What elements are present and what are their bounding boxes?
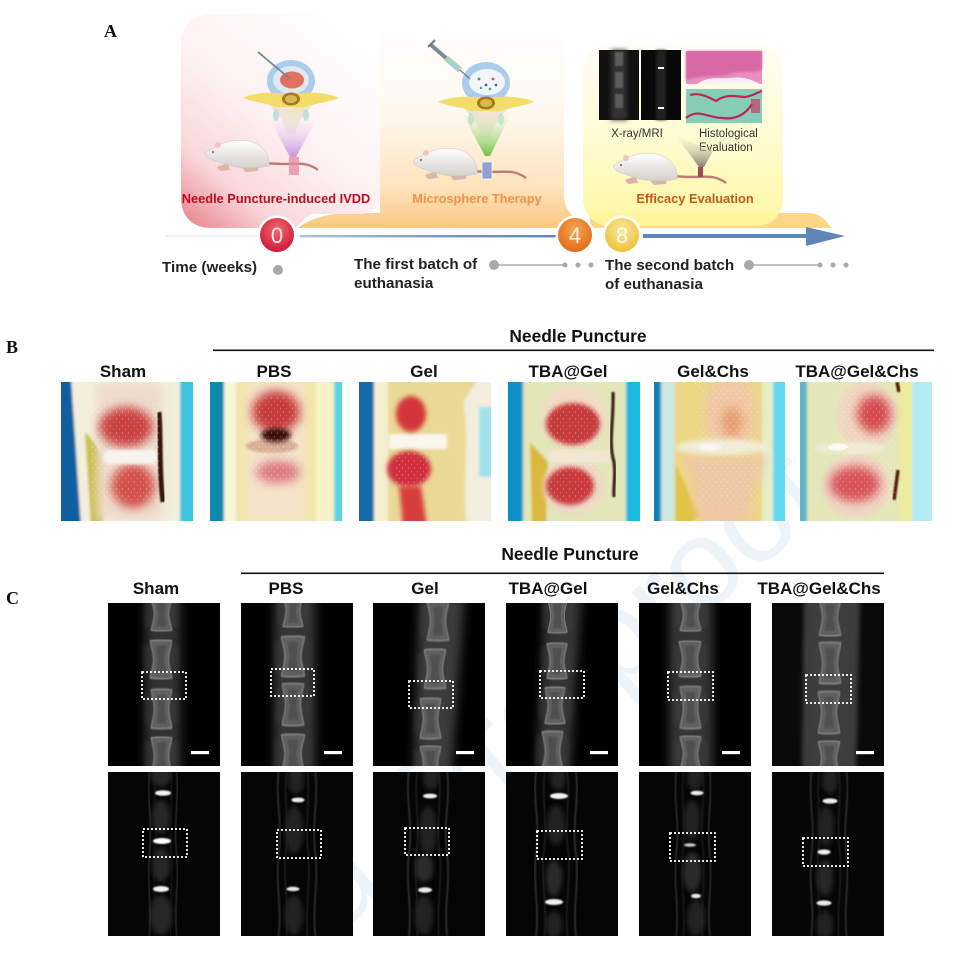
MRI: TBA@Gel — [506, 772, 618, 936]
label: X-ray/MRI: X-ray/MRI — [611, 128, 663, 140]
MRI: TBA@Gel&Chs — [772, 772, 884, 936]
group line: needle puncture (imaging) — [241, 572, 884, 574]
MRI: Gel&Chs — [639, 772, 751, 936]
image: mini x-ray — [599, 50, 639, 120]
label: Gel&Chs: Gel&Chs — [677, 362, 749, 381]
panel letter A: A — [104, 21, 117, 41]
label: Gel: Gel — [411, 579, 439, 598]
label: PBS: PBS — [257, 362, 291, 381]
photo: Sham — [61, 382, 193, 521]
label: Gel&Chs: Gel&Chs — [647, 579, 719, 598]
image: mini MRI — [641, 50, 681, 120]
photo: TBA@Gel&Chs — [800, 382, 932, 521]
label: time (weeks): Time (weeks) — [162, 259, 257, 276]
illustration: needle puncture of disc — [205, 52, 339, 175]
marker: week 0: 0 — [271, 223, 283, 248]
label: first batch: The first batch of — [354, 256, 477, 273]
MRI: Sham — [108, 772, 220, 936]
panel letter B: B — [6, 337, 18, 357]
watermark: letter a: a — [265, 805, 409, 955]
label: TBA@Gel: TBA@Gel — [529, 362, 607, 381]
orange timeline band — [590, 213, 831, 228]
label: second batch: of euthanasia — [605, 276, 703, 293]
watermark: Pre-proof: Pre-proof — [365, 421, 849, 868]
panel: needle puncture background — [181, 14, 380, 228]
icon: rat — [205, 140, 318, 172]
label: second batch: The second batch — [605, 257, 734, 274]
photo: PBS — [210, 382, 342, 521]
label: Gel: Gel — [410, 362, 438, 381]
label: histological evaluation: Histological — [699, 128, 758, 140]
image: H&E histology — [686, 51, 762, 84]
x-ray: PBS — [241, 603, 353, 766]
photo: TBA@Gel — [508, 382, 640, 521]
x-ray: Gel — [373, 603, 485, 766]
marker: week 8 — [602, 216, 642, 254]
photo: Gel&Chs — [654, 382, 785, 521]
heading: needle puncture (imaging): Needle Puncture — [501, 544, 639, 564]
arrow: time axis — [165, 227, 845, 246]
panel A: experimental timeline — [162, 14, 848, 293]
label: TBA@Gel&Chs: TBA@Gel&Chs — [795, 362, 919, 381]
label: PBS: PBS — [269, 579, 303, 598]
marker: week 4: 4 — [569, 223, 581, 248]
label: first batch: euthanasia — [354, 275, 434, 292]
marker: evaluation site — [698, 167, 703, 177]
icon: syringe — [428, 40, 470, 79]
illustration: microsphere injection — [413, 40, 534, 180]
caption: microsphere therapy: Microsphere Therapy — [412, 191, 543, 206]
marker: puncture site — [289, 157, 299, 175]
illustration: efficacy evaluation — [599, 50, 762, 185]
icon: spine cross section — [243, 92, 339, 134]
MRI: Gel — [373, 772, 485, 936]
icon: disc — [267, 60, 315, 102]
x-ray: Sham — [108, 603, 220, 766]
MRI: PBS — [241, 772, 353, 936]
label: histological evaluation: Evaluation — [699, 142, 753, 154]
x-ray: TBA@Gel&Chs — [772, 603, 884, 766]
icon: spine cross section — [438, 96, 534, 138]
caption: efficacy evaluation: Efficacy Evaluation — [636, 191, 754, 206]
icon: rat — [413, 148, 526, 180]
group line: needle puncture (gross) — [213, 350, 934, 351]
icon: needle — [258, 52, 289, 78]
icon: disc with microspheres — [462, 62, 510, 104]
panel letter C: C — [6, 588, 19, 608]
marker: week 8: 8 — [616, 223, 628, 248]
cone: purple highlight — [270, 120, 316, 157]
marker: week 0 — [258, 216, 296, 254]
marker: injection site — [482, 162, 492, 179]
leader: first batch — [489, 260, 594, 270]
label: Sham: Sham — [133, 579, 179, 598]
x-ray: Gel&Chs — [639, 603, 751, 766]
caption: needle puncture: Needle Puncture-induced IVDD — [182, 191, 370, 206]
panel: microsphere therapy background — [298, 26, 600, 228]
icon: rat — [613, 153, 726, 185]
label: Sham: Sham — [100, 362, 146, 381]
cone: grey highlight — [676, 136, 713, 167]
photo: Gel — [359, 382, 491, 521]
label: TBA@Gel: TBA@Gel — [509, 579, 587, 598]
leader: second batch — [744, 260, 848, 270]
dot: time marker — [273, 265, 283, 275]
x-ray: TBA@Gel — [506, 603, 618, 766]
marker: week 4 — [556, 216, 594, 254]
image: safranin histology — [686, 89, 762, 123]
panel: efficacy evaluation background — [583, 44, 783, 226]
label: TBA@Gel&Chs: TBA@Gel&Chs — [757, 579, 881, 598]
heading: needle puncture (gross): Needle Puncture — [509, 326, 647, 346]
cone: green highlight — [463, 115, 510, 156]
